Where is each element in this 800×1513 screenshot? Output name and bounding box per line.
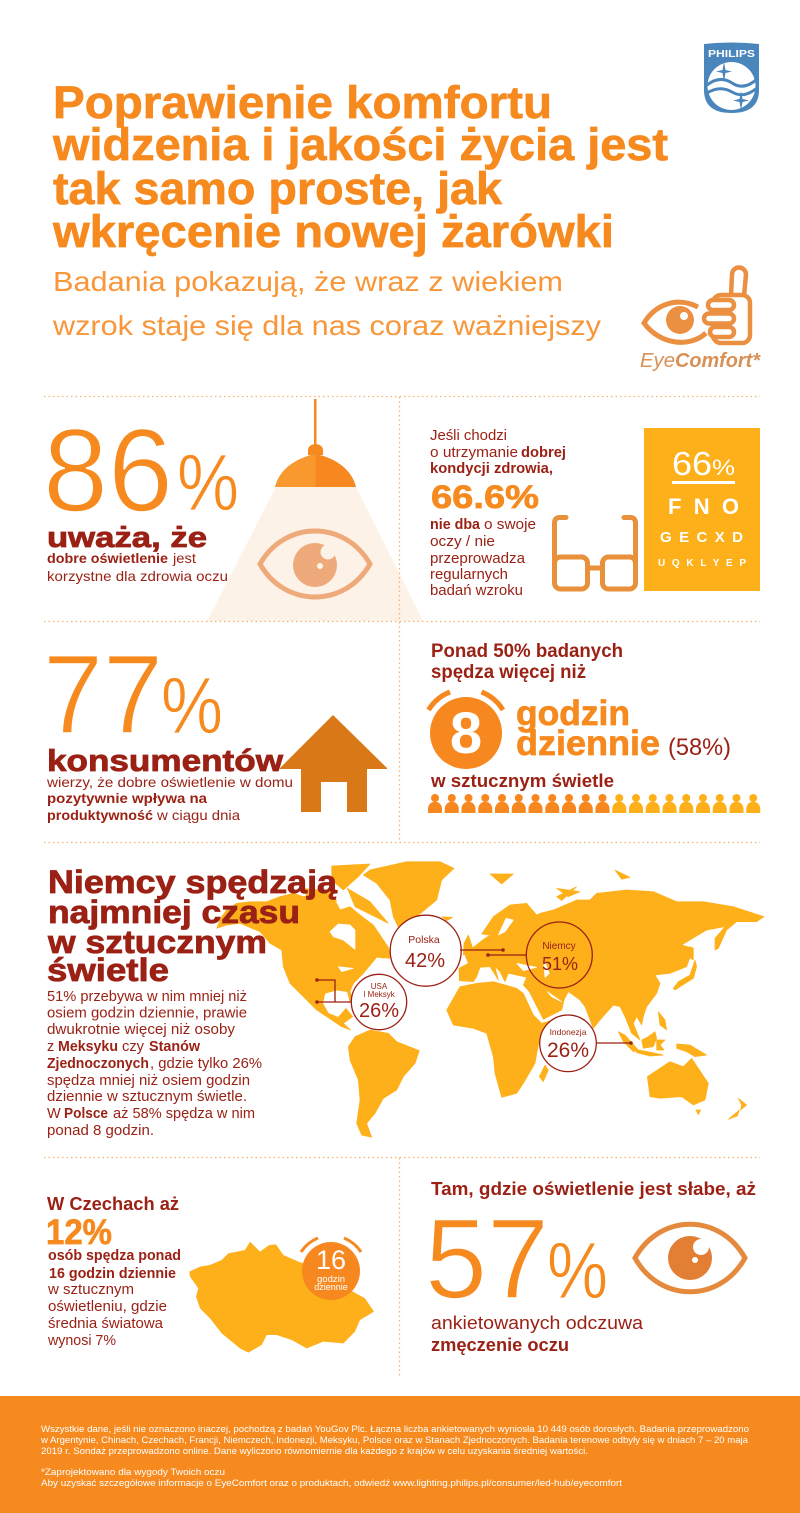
stat: 86 percent: 86 xyxy=(43,405,173,537)
text: country comparison: osiem godzin dziennie, prawie xyxy=(47,1006,247,1022)
text: country comparison: z xyxy=(47,1039,54,1055)
callout: USA and Mexico: I Meksyk xyxy=(363,990,396,999)
stat: 8 hours per day: (58%) xyxy=(668,734,731,761)
callout: Poland: Polska xyxy=(408,934,440,946)
icon: alarm clock: 8 xyxy=(450,701,482,766)
heading: Germany least time in artificial light xyxy=(47,864,337,988)
stat: 77 percent: w ciągu dnia xyxy=(156,807,240,823)
subtitle: wzrok staje się dla nas coraz ważniejszy xyxy=(52,310,601,341)
title: widzenia i jakości życia jest xyxy=(52,119,668,170)
text: country comparison: 51% przebywa w nim mniej niż xyxy=(47,989,247,1005)
footer: w Argentynie, Chinach, Czechach, Francji, Niemczech, Indonezji, Meksyku, Polsce oraz w Stanach Zjednoczonych. Badania terenowe odbyły się w dniach 7 – 20 maja xyxy=(40,1435,748,1445)
eye chart: % xyxy=(712,455,735,480)
stat: 86 percent: dobre oświetlenie xyxy=(47,550,168,566)
text: Czech Republic 12 percent xyxy=(46,1194,181,1349)
text: country comparison: W xyxy=(47,1106,61,1122)
text: eye health 66.6 percent: 66.6% xyxy=(431,479,539,515)
logo: Philips shield: PHILIPS xyxy=(708,49,755,60)
title: wkręcenie nowej żarówki xyxy=(52,206,614,257)
stat: 86 percent xyxy=(43,405,239,584)
logo: EyeComfort eye and thumb: Comfort* xyxy=(675,350,761,372)
stat: 77 percent: pozytywnie wpływa na xyxy=(47,790,207,806)
text: country comparison: spędza mniej niż osiem godzin xyxy=(47,1073,250,1089)
footer: *Zaprojektowano dla wygody Twoich oczu xyxy=(41,1467,225,1477)
logo: EyeComfort eye and thumb xyxy=(640,268,761,372)
eye chart: G E C X D xyxy=(660,529,743,546)
subtitle xyxy=(52,266,601,341)
subtitle: Badania pokazują, że wraz z wiekiem xyxy=(53,266,563,297)
stat: 57 percent eye strain: zmęczenie oczu xyxy=(431,1335,569,1355)
heading: Germany least time in artificial light: Niemcy spędzają xyxy=(48,864,337,900)
stat: 57 percent eye strain: Tam, gdzie oświetlenie jest słabe, aż xyxy=(431,1179,756,1199)
heading: Germany least time in artificial light: świetle xyxy=(47,952,169,988)
stat: 8 hours per day: w sztucznym świetle xyxy=(430,771,614,791)
heading: Germany least time in artificial light: w sztucznym xyxy=(47,924,267,960)
text: country comparison: ponad 8 godzin. xyxy=(47,1123,154,1139)
stat: 8 hours per day: spędza więcej niż xyxy=(431,662,586,683)
icon: clock 16 hours: godzin xyxy=(317,1274,345,1285)
text: country comparison: dziennie w sztucznym świetle. xyxy=(47,1089,247,1105)
callout: Germany: Niemcy xyxy=(542,941,576,952)
text: eye health 66.6 percent: o utrzymanie xyxy=(430,444,518,461)
text: Czech Republic 12 percent: W Czechach aż xyxy=(47,1194,179,1214)
text: Czech Republic 12 percent: średnia światowa xyxy=(48,1316,164,1332)
text: eye health 66.6 percent: przeprowadza xyxy=(430,550,526,567)
text: Czech Republic 12 percent: w sztucznym xyxy=(47,1282,134,1298)
text: eye health 66.6 percent: regularnych xyxy=(430,566,508,583)
text: country comparison: Stanów xyxy=(149,1039,201,1055)
stat: 77 percent xyxy=(43,632,293,823)
text: eye health 66.6 percent: Jeśli chodzi xyxy=(430,427,507,444)
stat: 86 percent: jest xyxy=(172,550,196,566)
stat: 57 percent eye strain: ankietowanych odczuwa xyxy=(431,1313,644,1333)
text: country comparison xyxy=(47,989,262,1139)
text: eye health 66.6 percent xyxy=(430,427,566,599)
text: Czech Republic 12 percent: 16 godzin dziennie xyxy=(49,1266,176,1282)
callout: USA and Mexico: 26% xyxy=(359,1000,399,1022)
stat: 8 hours per day xyxy=(428,641,731,791)
stat: 86 percent: % xyxy=(177,438,239,527)
stat: 57 percent eye strain xyxy=(425,1179,756,1355)
icon: alarm clock xyxy=(428,692,503,769)
footer: Wszystkie dane, jeśli nie oznaczono inaczej, pochodzą z badań YouGov Plc. Łączna liczba ankietowanych wyniosła 10 449 osób dorosłych. Badania przeprowadzono xyxy=(41,1424,749,1434)
text: Czech Republic 12 percent: 12% xyxy=(46,1213,112,1252)
eye chart: F N O xyxy=(668,494,739,519)
stat: 57 percent eye strain: % xyxy=(547,1226,608,1315)
text: eye health 66.6 percent: badań wzroku xyxy=(430,582,523,599)
text: eye health 66.6 percent: nie dba xyxy=(430,516,481,533)
stat: 86 percent: korzystne dla zdrowia oczu xyxy=(47,568,228,584)
text: country comparison: , gdzie tylko 26% xyxy=(150,1056,262,1072)
heading: Germany least time in artificial light: najmniej czasu xyxy=(48,894,300,930)
footer xyxy=(0,1396,800,1513)
text: country comparison: Meksyku xyxy=(58,1039,118,1055)
stat: 8 hours per day: godzin xyxy=(516,694,630,733)
stat: 57 percent eye strain: 57 xyxy=(425,1196,549,1323)
stat: 8 hours per day: dziennie xyxy=(516,724,660,763)
callout: Indonesia: 26% xyxy=(547,1039,589,1062)
text: country comparison: czy xyxy=(122,1039,145,1055)
callout: USA and Mexico xyxy=(315,974,407,1030)
footer: Aby uzyskać szczegółowe informacje o EyeComfort oraz o produktach, odwiedź www.lighting.philips.pl/consumer/led-hub/eyecomfort xyxy=(41,1478,623,1488)
icon: clock 16 hours: dziennie xyxy=(314,1282,348,1292)
callout: Indonesia: Indonezja xyxy=(550,1027,587,1037)
light cone xyxy=(207,487,423,621)
callout: Germany: 51% xyxy=(542,954,578,974)
text: country comparison: Zjednoczonych xyxy=(47,1056,149,1072)
text: country comparison: aż 58% spędza w nim xyxy=(113,1106,255,1122)
text: country comparison: dwukrotnie więcej niż osoby xyxy=(47,1022,236,1038)
text: eye health 66.6 percent: oczy / nie xyxy=(430,533,495,550)
text: Czech Republic 12 percent: oświetleniu, gdzie xyxy=(48,1299,167,1315)
callout: Germany xyxy=(486,922,592,988)
stat: 86 percent: uważa, że xyxy=(47,522,207,554)
icon: eye in light xyxy=(260,531,370,597)
icon: eye xyxy=(635,1224,745,1292)
pictogram: 58 percent of people xyxy=(428,794,760,813)
icon: glasses xyxy=(554,518,636,589)
title: Poprawienie komfortu xyxy=(53,77,552,128)
stat: 77 percent: produktywność xyxy=(47,807,153,823)
eye chart: U Q K L Y E P xyxy=(658,558,746,569)
icon: house xyxy=(280,715,387,812)
icon: clock 16 hours: 16 xyxy=(316,1245,346,1275)
logo: Philips shield xyxy=(704,42,759,113)
text: eye health 66.6 percent: dobrej xyxy=(521,444,566,461)
icon: ceiling lamp xyxy=(275,399,356,487)
text: country comparison: Polsce xyxy=(64,1106,108,1122)
title: tak samo proste, jak xyxy=(53,163,503,214)
title xyxy=(52,77,668,257)
stat: 77 percent: konsumentów xyxy=(47,743,284,778)
callout: Indonesia xyxy=(540,1015,633,1072)
stat: 77 percent: % xyxy=(161,661,223,750)
map: Czech Republic xyxy=(189,1242,374,1353)
callout: USA and Mexico: USA xyxy=(371,982,388,991)
eye chart xyxy=(644,428,760,591)
icon: clock 16 hours xyxy=(301,1238,361,1300)
text: eye health 66.6 percent: o swoje xyxy=(484,516,536,533)
text: Czech Republic 12 percent: wynosi 7% xyxy=(47,1333,116,1349)
stat: 77 percent: 77 xyxy=(43,632,163,757)
logo: EyeComfort eye and thumb: Eye xyxy=(640,350,675,372)
callout: Poland: 42% xyxy=(405,950,445,972)
callout: Poland xyxy=(390,915,505,986)
stat: 77 percent: wierzy, że dobre oświetlenie w domu xyxy=(46,774,293,790)
world map xyxy=(217,862,764,1137)
text: Czech Republic 12 percent: osób spędza ponad xyxy=(48,1248,181,1264)
eye chart: 66 xyxy=(672,445,712,482)
stat: 8 hours per day: Ponad 50% badanych xyxy=(431,641,623,662)
footer: 2019 r. Sondaż przeprowadzono online. Dane wyliczono równomiernie dla każdego z krajów w celu uzyskania średniej wartości. xyxy=(41,1446,588,1456)
text: eye health 66.6 percent: kondycji zdrowia, xyxy=(430,460,553,477)
